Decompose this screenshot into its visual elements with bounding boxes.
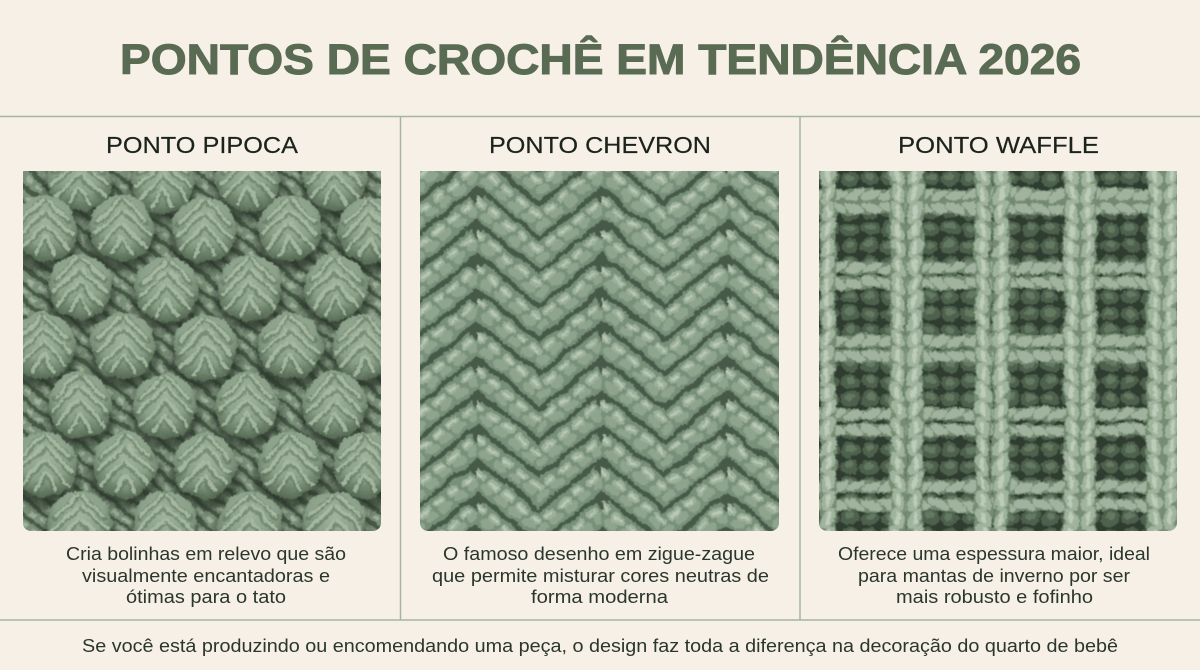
description: ponto pipoca [66, 543, 346, 607]
panel: ponto pipoca [23, 136, 381, 607]
heading: ponto waffle: PONTO WAFFLE [898, 132, 1099, 158]
footer note: Se você está produzindo ou encomendando uma peça, o design faz toda a diferença na decoração do quarto de bebê [82, 635, 1118, 656]
image: chevron stitch texture [420, 171, 779, 531]
title: PONTOS DE CROCHÊ EM TENDÊNCIA 2026 [120, 35, 1081, 84]
heading: ponto pipoca: PONTO PIPOCA [106, 132, 299, 158]
description: ponto chevron [432, 543, 769, 607]
description: ponto waffle: Oferece uma espessura maior, ideal [838, 543, 1150, 564]
description: ponto chevron: que permite misturar cores neutras de [432, 565, 769, 586]
description: ponto waffle: mais robusto e fofinho [896, 586, 1093, 607]
description: ponto chevron: forma moderna [531, 586, 669, 607]
description: ponto waffle [838, 543, 1150, 607]
panel: ponto waffle [819, 136, 1177, 603]
image: waffle stitch texture [819, 171, 1177, 531]
description: ponto waffle: para mantas de inverno por ser [858, 565, 1130, 586]
description: ponto pipoca: Cria bolinhas em relevo que são [66, 543, 346, 564]
description: ponto chevron: O famoso desenho em zigue-zague [443, 543, 755, 564]
description: ponto pipoca: ótimas para o tato [126, 586, 286, 607]
description: ponto pipoca: visualmente encantadoras e [82, 565, 330, 586]
panel: ponto chevron [405, 132, 794, 607]
image: popcorn stitch texture [23, 171, 381, 531]
heading: ponto chevron: PONTO CHEVRON [489, 132, 711, 158]
